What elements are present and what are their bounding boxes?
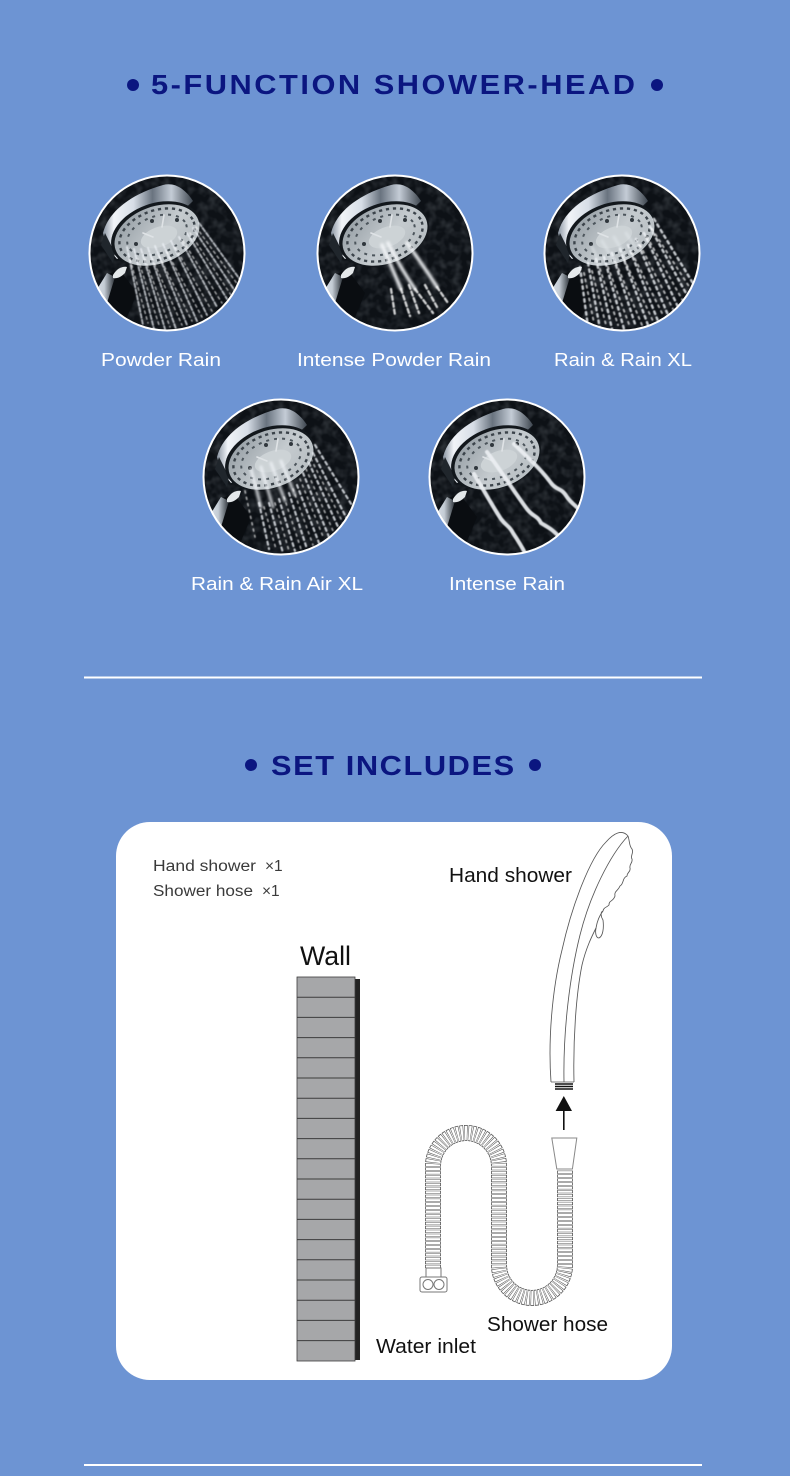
panel: intense powder rain function (297, 175, 491, 370)
text block: contents list (153, 858, 283, 900)
label: hand shower: Hand shower (449, 865, 572, 887)
wall (297, 977, 360, 1361)
label: intense rain: Intense Rain (449, 573, 565, 594)
photo: intense rain jets (429, 399, 585, 555)
label: water inlet: Water inlet (376, 1336, 476, 1358)
text block: contents list: ×1 (262, 883, 280, 900)
icon: shower hose (420, 1133, 577, 1298)
label: wall: Wall (300, 941, 351, 971)
panel: rain and rain air xl function (191, 399, 363, 594)
label: rain and rain air xl: Rain & Rain Air XL (191, 573, 363, 594)
hose connector (552, 1138, 577, 1169)
heading: set includes: SET INCLUDES (271, 750, 514, 782)
hose inlet nut (420, 1268, 447, 1292)
panel: intense rain function (429, 399, 585, 594)
label: powder rain: Powder Rain (101, 349, 221, 370)
photo: rain and rain xl spray (544, 175, 700, 331)
photo: rain and rain air xl spray (203, 399, 359, 555)
text block: contents list: Hand shower (153, 858, 256, 875)
text block: contents list: Shower hose (153, 883, 253, 900)
photo: powder rain spray (89, 175, 245, 331)
arrow: hose connects to hand shower (556, 1096, 572, 1130)
panel: powder rain function (89, 175, 245, 370)
panel: rain and rain xl function (544, 175, 700, 370)
label: shower hose: Shower hose (487, 1314, 608, 1336)
heading: 5-function shower-head: 5-FUNCTION SHOWER-HEAD (151, 69, 635, 101)
card background (116, 822, 672, 1380)
label: intense powder rain: Intense Powder Rain (297, 349, 491, 370)
text block: contents list: ×1 (265, 858, 283, 875)
photo: intense powder rain spray (317, 175, 473, 331)
panel: set includes diagram (116, 822, 672, 1380)
label: rain and rain xl: Rain & Rain XL (554, 349, 692, 370)
icon: hand shower line drawing (550, 832, 633, 1089)
